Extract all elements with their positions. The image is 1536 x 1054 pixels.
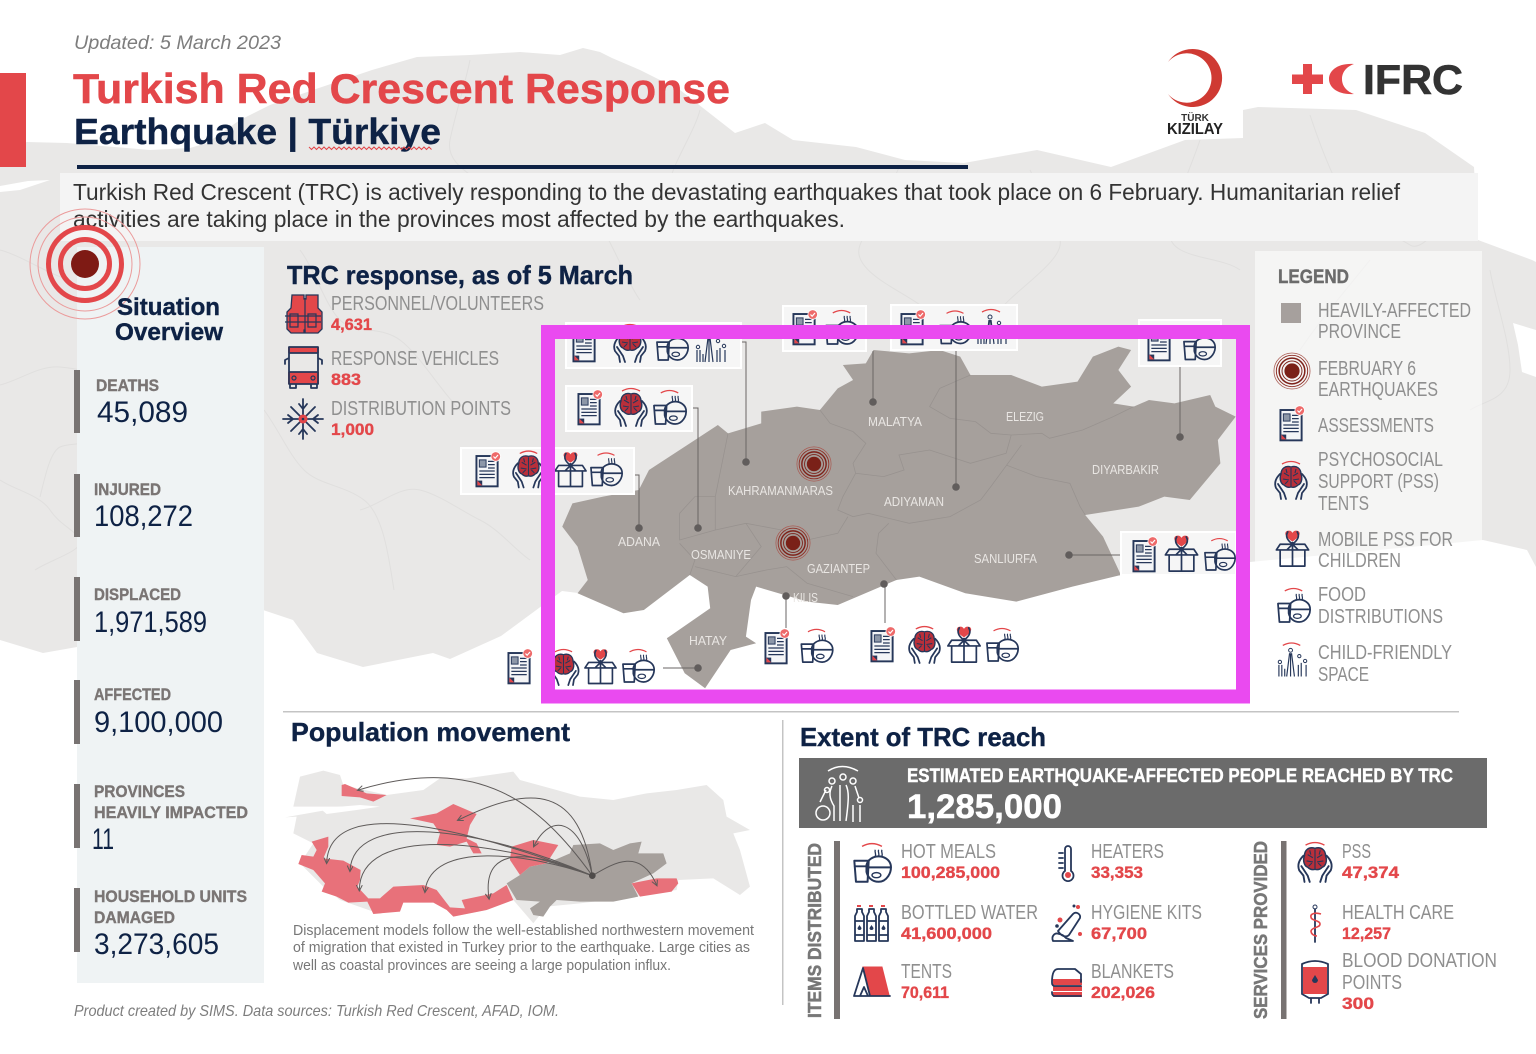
- legend: PSS tents: TENTS: [1318, 493, 1369, 515]
- service: health care: HEALTH CARE: [1342, 902, 1454, 924]
- service: PSS: 47,374: [1342, 863, 1400, 882]
- legend: child-friendly: CHILD-FRIENDLY: [1318, 642, 1452, 664]
- service: blood donation: 300: [1342, 994, 1374, 1013]
- heading: [115, 294, 223, 346]
- legend: earthquakes: EARTHQUAKES: [1318, 379, 1438, 401]
- legend: assessments: [1280, 406, 1434, 440]
- icon box: Osmaniye: [566, 386, 692, 431]
- legend: food: [1278, 584, 1443, 628]
- legend: earthquakes: [1274, 353, 1438, 401]
- service: PSS: PSS: [1342, 841, 1371, 863]
- legend: child-friendly: [1278, 642, 1452, 686]
- province labels: GAZIANTEP: [807, 561, 870, 576]
- stat: deaths: DEATHS: [96, 376, 159, 395]
- text: displacement note: of migration that existed in Turkey prior to the earthquake. Large cities as: [293, 940, 750, 956]
- item: bottled water: 41,600,000: [901, 924, 992, 943]
- stat: provinces heavily impacted: [74, 782, 248, 856]
- response: vehicles: RESPONSE VEHICLES: [331, 348, 499, 370]
- panel: situation overview: [30, 209, 264, 983]
- intro panel: [60, 173, 1478, 241]
- province labels: HATAY: [689, 633, 727, 648]
- item: hygiene kits: [1052, 902, 1202, 943]
- title: Turkish Red Crescent Response: [73, 65, 730, 112]
- service: blood donation: [1302, 950, 1497, 1013]
- text: displacement note: Displacement models follow the well-established northwestern movement: [293, 923, 754, 939]
- heading: Overview: [115, 319, 223, 346]
- legend: heavily affected: PROVINCE: [1318, 321, 1401, 343]
- legend: heavily affected: HEAVILY-AFFECTED: [1318, 300, 1471, 322]
- stat: affected: AFFECTED: [94, 685, 171, 704]
- stat: household units damaged: HOUSEHOLD UNITS: [94, 887, 247, 906]
- stat: deaths: [74, 370, 188, 433]
- icon: earthquake target: [30, 209, 140, 319]
- legend: PSS tents: PSYCHOSOCIAL: [1318, 449, 1443, 471]
- updated date: Updated: 5 March 2023: [74, 33, 281, 54]
- icon group: Gaziantep: [871, 627, 1018, 663]
- item: hygiene kits: 67,700: [1091, 924, 1147, 943]
- earthquake epicentres: [776, 447, 831, 560]
- panel: legend: LEGEND: [1278, 267, 1349, 288]
- service: health care: [1311, 902, 1454, 943]
- stat: household units damaged: [74, 887, 247, 961]
- icon box: Kahramanmaras: [566, 323, 741, 368]
- panel: items distributed: [805, 841, 1202, 1019]
- response: vehicles: [285, 347, 499, 389]
- legend: assessments: ASSESSMENTS: [1318, 415, 1434, 437]
- stat: displaced: DISPLACED: [94, 585, 181, 604]
- stat: affected: [74, 680, 223, 744]
- province labels: ELEZIG: [1006, 409, 1044, 424]
- heavily affected provinces map: [562, 347, 1236, 688]
- item: tents: [854, 961, 952, 1002]
- legend: mobile PSS: MOBILE PSS FOR: [1318, 529, 1453, 551]
- item: blankets: [1052, 961, 1174, 1002]
- stat: injured: INJURED: [94, 480, 161, 499]
- item: bottled water: BOTTLED WATER: [901, 902, 1038, 924]
- province labels: MALATYA: [868, 414, 922, 429]
- panel: legend: [1255, 251, 1482, 701]
- logo: Turk Kizilay: KIZILAY: [1167, 121, 1223, 138]
- legend: PSS tents: [1275, 449, 1443, 515]
- response: distribution points: DISTRIBUTION POINTS: [331, 398, 511, 420]
- province labels: KILIS: [793, 590, 818, 605]
- item: hot meals: 100,285,000: [901, 863, 1000, 882]
- service: blood donation: BLOOD DONATION: [1342, 950, 1497, 972]
- response: personnel: 4,631: [331, 315, 372, 334]
- heading: TRC response: TRC response, as of 5 March: [287, 260, 633, 290]
- panel: items distributed: ITEMS DISTRIBUTED: [805, 843, 825, 1018]
- logo: Turk Kizilay: TÜRK: [1181, 111, 1210, 124]
- stat: injured: 108,272: [94, 500, 193, 533]
- icon: bus: [285, 347, 322, 388]
- text: displacement note: well as coastal provinces are seeing a large population influx.: [292, 958, 671, 974]
- stat: affected: 9,100,000: [94, 706, 223, 739]
- stat: household units damaged: DAMAGED: [94, 908, 175, 927]
- province labels: SANLIURFA: [974, 551, 1037, 566]
- item: blankets: 202,026: [1091, 983, 1155, 1002]
- item: heaters: 33,353: [1091, 863, 1143, 882]
- response: distribution points: [283, 398, 511, 439]
- icon box: Sanliurfa: [1121, 532, 1236, 575]
- response: personnel: [285, 293, 544, 334]
- icon: vest: [285, 295, 322, 333]
- response: personnel: PERSONNEL/VOLUNTEERS: [331, 293, 544, 315]
- icon box: Diyarbakir: [1139, 320, 1221, 366]
- intro panel: Turkish Red Crescent (TRC) is actively responding to the devastating earthquakes that took place on 6 February. Humanitarian relief: [73, 179, 1401, 205]
- heading: population movement: Population movement: [291, 717, 570, 747]
- item: blankets: BLANKETS: [1091, 961, 1174, 983]
- item: hot meals: HOT MEALS: [901, 841, 996, 863]
- banner: people reached: ESTIMATED EARTHQUAKE-AFFECTED PEOPLE REACHED BY TRC: [907, 766, 1453, 787]
- item: hygiene kits: HYGIENE KITS: [1091, 902, 1202, 924]
- legend: heavily affected: [1281, 300, 1471, 343]
- stat: household units damaged: 3,273,605: [94, 928, 219, 961]
- panel: services provided: [1251, 841, 1497, 1019]
- banner: people reached: [799, 758, 1487, 828]
- logo: IFRC: [1292, 56, 1463, 103]
- stat: provinces heavily impacted: 11: [92, 823, 114, 856]
- icon box: Adiyaman: [891, 305, 1017, 350]
- legend: PSS tents: SUPPORT (PSS): [1318, 471, 1439, 493]
- stat: displaced: 1,971,589: [94, 606, 207, 639]
- footer source: Product created by SIMS. Data sources: Turkish Red Crescent, AFAD, IOM.: [74, 1003, 559, 1020]
- response: distribution points: 1,000: [331, 420, 374, 439]
- province labels: [618, 409, 1159, 648]
- service: PSS: [1298, 841, 1400, 882]
- chart: population movement map: [285, 771, 750, 923]
- icon group: Hatay: [508, 649, 654, 685]
- item: heaters: [1059, 841, 1164, 882]
- accent bar: [0, 73, 26, 167]
- stat: deaths: 45,089: [97, 396, 188, 429]
- province labels: ADANA: [618, 534, 660, 549]
- logo: IFRC: IFRC: [1363, 56, 1463, 103]
- highlight frame: [548, 332, 1243, 696]
- province labels: OSMANIYE: [691, 547, 751, 562]
- item: tents: TENTS: [901, 961, 952, 983]
- banner: people reached: 1,285,000: [907, 788, 1062, 826]
- service: health care: 12,257: [1342, 924, 1391, 943]
- response: vehicles: 883: [331, 370, 361, 389]
- stat: provinces heavily impacted: HEAVILY IMPACTED: [94, 803, 248, 822]
- legend: earthquakes: FEBRUARY 6: [1318, 358, 1416, 380]
- icon: people: [816, 766, 862, 822]
- legend: food: DISTRIBUTIONS: [1318, 606, 1443, 628]
- heading: Situation: [117, 294, 220, 321]
- intro panel: activities are taking place in the provinces most affected by the earthquakes.: [73, 206, 845, 232]
- item: hot meals: [854, 841, 1000, 882]
- text: displacement note: [292, 923, 754, 974]
- province labels: ADIYAMAN: [884, 494, 944, 509]
- legend: mobile PSS: [1276, 529, 1453, 572]
- province labels: DIYARBAKIR: [1092, 462, 1159, 477]
- connector lines to provinces: [634, 342, 1184, 672]
- item: heaters: HEATERS: [1091, 841, 1164, 863]
- heading: extent of reach: Extent of TRC reach: [800, 722, 1046, 752]
- movement arrows: [327, 778, 657, 898]
- affected provinces in grey: [507, 842, 667, 917]
- icon: distribution: [283, 399, 323, 439]
- stat: displaced: [74, 577, 207, 641]
- logo: Turk Kizilay: [1167, 49, 1223, 138]
- item: bottled water: [855, 902, 1038, 943]
- service: blood donation: POINTS: [1342, 972, 1402, 994]
- legend: child-friendly: SPACE: [1318, 664, 1369, 686]
- panel: services provided: SERVICES PROVIDED: [1251, 841, 1271, 1019]
- item: tents: 70,611: [901, 983, 949, 1002]
- stat: provinces heavily impacted: PROVINCES: [94, 782, 185, 801]
- icon group: Kilis: [765, 629, 833, 663]
- background map of Türkiye: [0, 48, 1536, 667]
- title: Earthquake | Türkiye: [74, 111, 441, 153]
- icon box: Malatya: [783, 306, 866, 351]
- province labels: KAHRAMANMARAS: [728, 483, 833, 498]
- icon box: Adana: [461, 448, 634, 494]
- receiving provinces in red: [298, 784, 678, 917]
- title: [73, 65, 730, 153]
- legend: food: FOOD: [1318, 584, 1366, 606]
- legend: mobile PSS: CHILDREN: [1318, 550, 1401, 572]
- stat: injured: [74, 474, 193, 537]
